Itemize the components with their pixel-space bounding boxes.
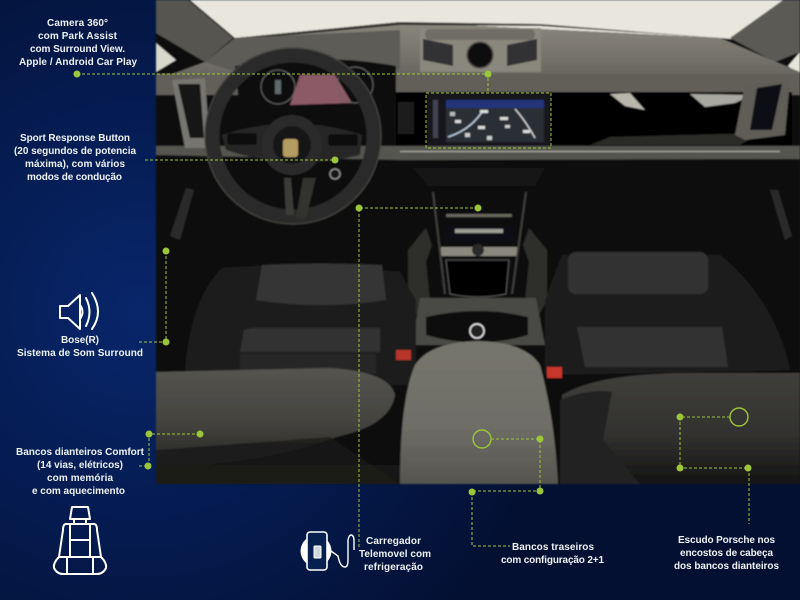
text: sport response button: (20 segundos de potencia bbox=[14, 146, 136, 157]
callout: comfort seats lines bbox=[137, 430, 204, 470]
right seat bbox=[545, 255, 790, 375]
interior photo illustration bbox=[156, 0, 800, 484]
text: sport response button bbox=[14, 133, 136, 183]
right rear headrest bbox=[560, 373, 800, 484]
icon: seat bbox=[54, 507, 106, 574]
console sides bbox=[408, 228, 432, 315]
right vent bbox=[735, 80, 790, 140]
center display bbox=[427, 93, 551, 145]
callout: charger lines bbox=[356, 204, 482, 548]
steering wheel bbox=[212, 55, 374, 217]
callout: sport button lines bbox=[145, 156, 338, 164]
text: comfort seats: e com aquecimento bbox=[32, 486, 125, 497]
text: rear seats bbox=[501, 542, 604, 566]
console frame lines bbox=[433, 192, 526, 294]
text: camera 360 bbox=[19, 18, 137, 68]
door handle right bbox=[770, 190, 792, 240]
callout: rear seats lines bbox=[468, 430, 544, 546]
text: Porsche crest headrests: dos bancos dianteiros bbox=[674, 561, 779, 572]
dashboard top bbox=[156, 22, 800, 95]
text: Bose: Sistema de Som Surround bbox=[17, 348, 143, 359]
right pillar bbox=[730, 0, 800, 62]
text: Porsche crest headrests: Escudo Porsche nos bbox=[678, 535, 775, 546]
text: charger: refrigeração bbox=[364, 562, 423, 573]
text: rear seats: Bancos traseiros bbox=[512, 542, 594, 553]
icon: speaker bbox=[60, 293, 98, 329]
text: comfort seats: (14 vias, elétricos) bbox=[37, 460, 123, 471]
callout: Bose lines bbox=[137, 248, 170, 346]
text: sport response button: máxima), com vários bbox=[25, 159, 125, 170]
text: Porsche crest headrests bbox=[674, 535, 779, 572]
switches bbox=[398, 102, 414, 134]
text: camera 360: com Park Assist bbox=[38, 31, 118, 42]
text: Bose bbox=[17, 335, 143, 359]
text: charger: Carregador bbox=[366, 536, 421, 547]
dash lower shell bbox=[156, 74, 800, 94]
text: rear seats: com configuração 2+1 bbox=[501, 555, 604, 566]
text: camera 360: Apple / Android Car Play bbox=[19, 57, 137, 68]
left seat bbox=[185, 266, 416, 385]
instrument cluster bbox=[235, 59, 396, 114]
windshield bbox=[156, 0, 800, 45]
text: sport response button: Sport Response Button bbox=[20, 133, 130, 144]
door handle left bbox=[170, 188, 194, 240]
Porsche crest bbox=[283, 139, 298, 157]
icon: wireless phone charger bbox=[300, 532, 354, 570]
callout: Porsche crest headrest lines bbox=[676, 408, 752, 524]
callout: camera lines bbox=[74, 70, 551, 148]
left pillar bbox=[156, 0, 233, 62]
text: camera 360: Camera 360° bbox=[47, 18, 108, 29]
text: sport response button: modos de condução bbox=[27, 172, 122, 183]
clock bbox=[467, 42, 493, 68]
text: comfort seats: Bancos dianteiros Comfort bbox=[16, 447, 145, 458]
center controls bbox=[413, 168, 545, 186]
text: comfort seats: com memória bbox=[47, 473, 113, 484]
dark dash band bbox=[396, 92, 792, 146]
text: Porsche crest headrests: encostos de cabeça bbox=[680, 548, 773, 559]
text: charger: Telemovel com bbox=[359, 549, 431, 560]
left rear headrest bbox=[156, 368, 395, 465]
text: comfort seats bbox=[16, 447, 145, 497]
left vent bbox=[172, 78, 210, 148]
lower trim bbox=[156, 146, 800, 160]
text: Bose: Bose(R) bbox=[61, 335, 99, 346]
text: charger bbox=[359, 536, 431, 573]
text: camera 360: com Surround View. bbox=[30, 44, 125, 55]
center armrest bbox=[400, 341, 558, 484]
cup holder bbox=[426, 311, 528, 342]
clock housing bbox=[420, 28, 541, 72]
